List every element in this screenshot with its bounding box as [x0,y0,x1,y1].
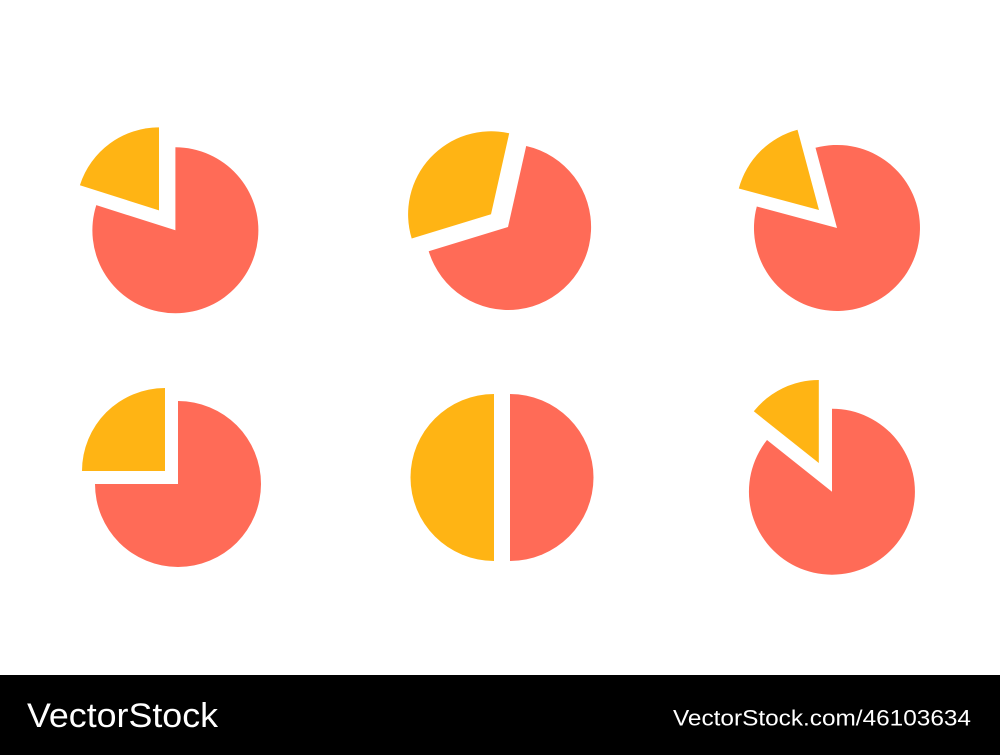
pie chart: top right [739,130,920,311]
pie chart: bottom right [749,380,915,575]
footer logo text: VectorStock [27,697,219,735]
pie chart: top left [80,127,258,313]
pie chart: top middle [408,131,591,310]
pie chart: bottom middle [410,394,594,561]
footer image id text: VectorStock.com/46103634 [673,706,971,730]
footer bar [0,675,1000,755]
pie chart: bottom left [82,388,261,567]
